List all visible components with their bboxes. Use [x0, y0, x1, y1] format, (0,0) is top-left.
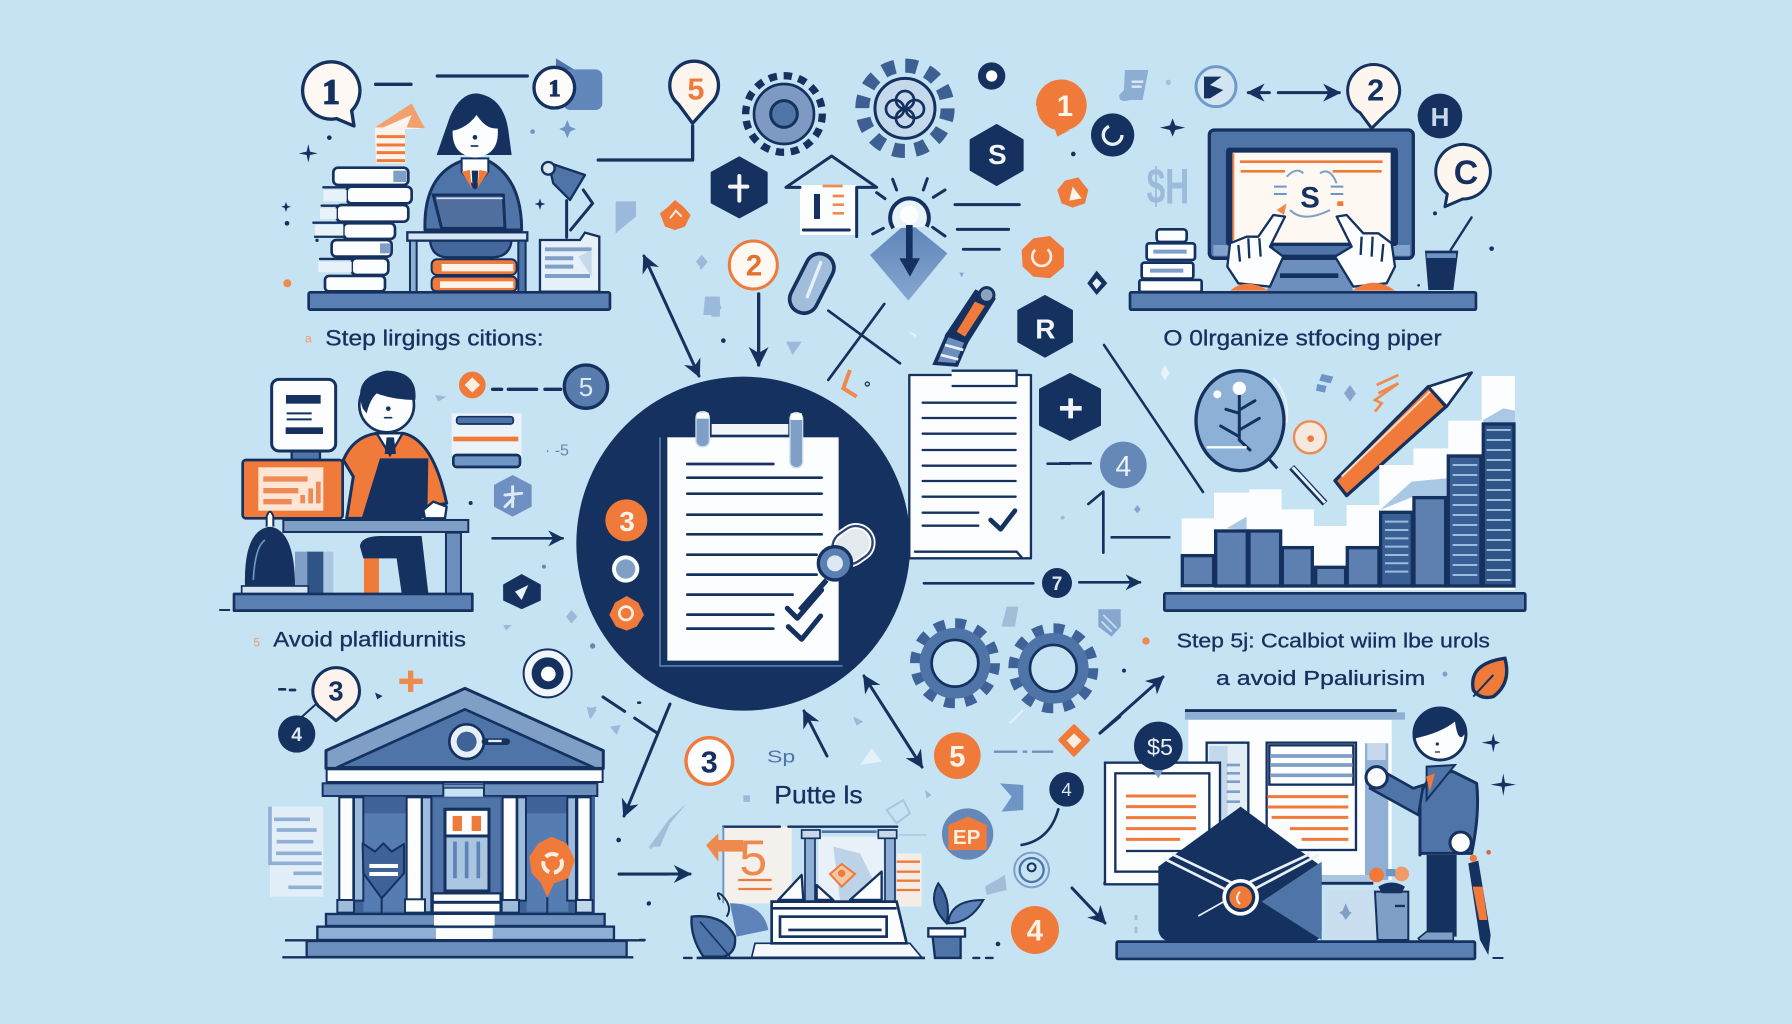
arrow toward centre [493, 534, 563, 542]
icon: circle number 7 [1042, 568, 1072, 598]
decorative plus and dashes [279, 671, 423, 699]
panel: institution building [270, 649, 668, 957]
icon: orange bubble number 1: 1 [1057, 90, 1073, 123]
icon: numbered folder 1: 1 [549, 76, 560, 102]
icon: ring dot [982, 66, 1001, 86]
icon: magnifier with plant [1196, 371, 1325, 503]
icon: concentric rings [1014, 853, 1049, 887]
text-like lines [955, 205, 1019, 249]
panel: step 2 organizing on monitor [1130, 65, 1494, 351]
connector shaped line [1088, 492, 1169, 553]
scattered fragments [570, 370, 1023, 726]
navy circle background [576, 377, 910, 711]
icon: vase with orange flowers [1369, 867, 1409, 940]
frame with paper and glyphs: 5 [739, 830, 767, 886]
stack of books [313, 168, 412, 291]
panel: presenter with envelope [1103, 672, 1516, 959]
figure: woman with laptop [425, 93, 522, 230]
paper clips [696, 412, 803, 468]
building steps [282, 893, 645, 957]
dashed cross line [603, 697, 663, 737]
small sparkles [1136, 672, 1516, 933]
icon: circle number 5 [564, 365, 608, 408]
icon: orange leaf badge [1473, 658, 1507, 697]
icon: envelope with orange seal [1158, 807, 1322, 942]
icon: ring dot [614, 557, 637, 581]
icon: orange circle number 4 [1011, 906, 1059, 954]
arrow: to chart [1079, 578, 1140, 586]
arrow: toward lower desk [619, 872, 690, 876]
icon: speech bubble number 2: 2 [1367, 74, 1384, 108]
icon: numbered folder 1 [534, 58, 602, 110]
icon: light bulb on diamond [870, 179, 947, 301]
partial arrow and edge of frame [638, 703, 1120, 733]
desk base shelf [234, 594, 472, 611]
faded currency glyph: $H [1147, 158, 1189, 214]
icon: orange number 3 [605, 499, 647, 541]
arrow: diagonal double to clipboard [644, 256, 699, 376]
double arrow [1248, 88, 1339, 97]
clipboard page [660, 424, 843, 666]
icon: hexagon S [971, 125, 1023, 185]
line to number 7 [924, 579, 1033, 587]
label: step 5 heading line 1: Step 5j: Ccalbiot wiim lbe urols [1177, 629, 1490, 652]
arrow: lower right double [864, 676, 922, 767]
small dots and triangles [220, 395, 595, 648]
light blue shadow [1227, 408, 1515, 530]
icon: small book stack [1139, 229, 1202, 292]
icon: circle number 2 [729, 241, 777, 289]
icon: pen cup [1425, 217, 1472, 290]
small layered stack icon [452, 413, 522, 468]
icon: small diamond [1087, 271, 1107, 295]
icon: shield badge [363, 843, 404, 913]
icon: desk lamp and document [540, 162, 599, 292]
pedestal box [697, 872, 925, 958]
icon: blue badge with orange glyph [942, 808, 993, 860]
icon: navy circle 4 with curve: 4 [1061, 779, 1072, 800]
icon: orange circle number 4: 4 [1027, 915, 1044, 948]
icon: navy badge [504, 575, 540, 608]
panel: chart with magnifier and pencil [1040, 365, 1525, 697]
icon: speech bubble C [1436, 144, 1490, 207]
figure: man in suit [1366, 708, 1478, 941]
icon: circle number 3: 3 [701, 745, 718, 779]
small label: Sp [767, 747, 795, 767]
presenter base shelf [1117, 942, 1475, 959]
desk with legs and chair [283, 520, 468, 594]
icon: circle number 3 [686, 738, 733, 784]
connector stub [1048, 460, 1070, 468]
presentation board [1103, 711, 1405, 940]
icon: orange star badge [609, 596, 644, 631]
icon: speech bubble number 2 [1348, 65, 1400, 128]
icon: navy circle glyph [1091, 113, 1134, 157]
monitor with stand and screen: S [1300, 182, 1320, 215]
icon: hexagon R [1018, 296, 1072, 357]
icon: small shield [1098, 609, 1121, 637]
icon: gear with hub [746, 76, 822, 152]
panel: puzzle workspace [638, 703, 1120, 958]
icon: orange bubble number 1 [1036, 79, 1087, 137]
white chart ghost steps [1182, 376, 1515, 590]
small dots [1122, 637, 1447, 676]
icon: navy bubble glyph [1134, 722, 1183, 778]
icon: circle number 4 with line: 4 [1115, 451, 1131, 483]
left document screen [1105, 763, 1220, 884]
icon: navy bubble glyph: $5 [1147, 734, 1173, 760]
sparkle and note icons [1071, 70, 1185, 156]
icon: speech bubble C: C [1454, 154, 1478, 192]
icon: leaf left [691, 893, 768, 957]
label: step 5 heading line 2: a avoid Ppaliurisim [1216, 667, 1425, 690]
icon: circle number 5: 5 [579, 372, 593, 402]
icon: orange badge [1057, 177, 1088, 208]
icon: hexagon plus [1040, 374, 1100, 440]
panel: avoid plagiarism worker [220, 365, 608, 652]
small orange mark: a [305, 332, 312, 346]
small decorative marks [1061, 365, 1398, 520]
small fragments [700, 257, 964, 355]
icon: pen [935, 288, 994, 365]
icon: hexagon R: R [1035, 313, 1055, 344]
panel: top centre icons [700, 66, 1189, 380]
icon: orange rosette pin [529, 837, 575, 914]
arrow down from 2 [754, 294, 764, 365]
panel: central clipboard circle [570, 370, 1093, 726]
icon: bubble 3 linked to circle 4 [278, 668, 359, 753]
icon: orange seal [1022, 236, 1064, 278]
icon: hexagon with cross [712, 157, 767, 217]
icon: circle H [1418, 94, 1462, 138]
icon: blue badge [494, 475, 532, 517]
icon: circle number 2: 2 [746, 250, 762, 283]
frame with paper and glyphs [706, 827, 927, 907]
icon: large pencil [1335, 373, 1472, 496]
building columns [337, 797, 593, 913]
building roof [323, 688, 603, 796]
icon: circle number 4 with line [1060, 442, 1147, 488]
bar stripes [1385, 430, 1511, 580]
icon: hexagon S: S [988, 139, 1007, 170]
label: organize heading: O 0lrganize stfocing piper [1163, 326, 1442, 351]
arrow: long diagonal to chart [1104, 345, 1203, 492]
panel: step 1 researcher at desk [281, 58, 720, 351]
icon: navy circle 4 with curve [1022, 772, 1084, 845]
monitor with stand and screen [1209, 130, 1413, 292]
arrow: up to circle [804, 711, 827, 756]
desk base shelf [309, 292, 610, 310]
icon: chain link key [800, 519, 879, 610]
icon: blue badge with orange glyph: EP [953, 826, 981, 849]
building wall and door [338, 797, 595, 913]
icon: circle number 7: 7 [1052, 574, 1062, 595]
orange screen [243, 460, 343, 518]
bag and binders [242, 512, 333, 594]
scattered fragments [640, 718, 1023, 958]
decorative sparkles [281, 120, 720, 317]
person seated with laptop [343, 371, 447, 518]
dashed link and orange diamond badge [994, 726, 1088, 755]
right-hand document [909, 371, 1031, 558]
crossed lines [828, 304, 900, 380]
small orange mark: 5 [253, 636, 260, 650]
icon: typing hands [1227, 201, 1395, 291]
icon: gears pair [915, 623, 1093, 708]
desk with orange books [407, 232, 527, 292]
icon: pin number 5 with connector [598, 61, 718, 160]
arrow: lower left diagonal [624, 704, 670, 816]
arrow: up right to step 5 [1100, 677, 1163, 733]
icon: pill shape [785, 249, 839, 318]
icon: orange target [1294, 421, 1326, 453]
icon: ring badge [524, 649, 572, 697]
chart base shelf [1164, 593, 1525, 611]
icon: orange number 3: 3 [619, 506, 635, 537]
icon: orange circle number 5 [934, 732, 981, 779]
icon: speech bubble number 1: 1 [322, 72, 340, 111]
bar chart [1182, 376, 1515, 590]
icon: orange badge with dashed connector [459, 372, 561, 398]
scattered dots [1417, 211, 1494, 287]
icon: bubble 3 linked to circle 4: 3 [328, 676, 344, 707]
icon: house document [786, 156, 877, 237]
label: avoid plagiarism heading: Avoid plaflidurnitis [273, 628, 466, 652]
small dots and fragments [587, 707, 668, 906]
icon: standing pen [1468, 855, 1503, 958]
icon: circle H: H [1431, 102, 1449, 132]
document monitor [272, 379, 336, 461]
connector lines [376, 76, 527, 84]
icon: striped paper arrow [375, 103, 425, 163]
small number mark: · -5 [545, 442, 569, 459]
icon: pin number 5 with connector: 5 [687, 72, 704, 106]
icon: potted plant [928, 883, 983, 958]
arrow: lower right short [1072, 888, 1105, 923]
navy bars [1182, 424, 1514, 586]
desk base shelf [1130, 292, 1476, 310]
faded document lines [270, 807, 323, 897]
label: step heading: Step lirgings citions: [325, 326, 544, 351]
icon: bubble 3 linked to circle 4: 4 [291, 725, 302, 746]
label: heading: Putte ls [774, 782, 863, 809]
icon: orange circle number 5: 5 [949, 741, 965, 774]
icon: broken gear with knot [862, 66, 948, 151]
icon: coin ring [1196, 67, 1236, 107]
icon: speech bubble number 1 [303, 62, 360, 126]
